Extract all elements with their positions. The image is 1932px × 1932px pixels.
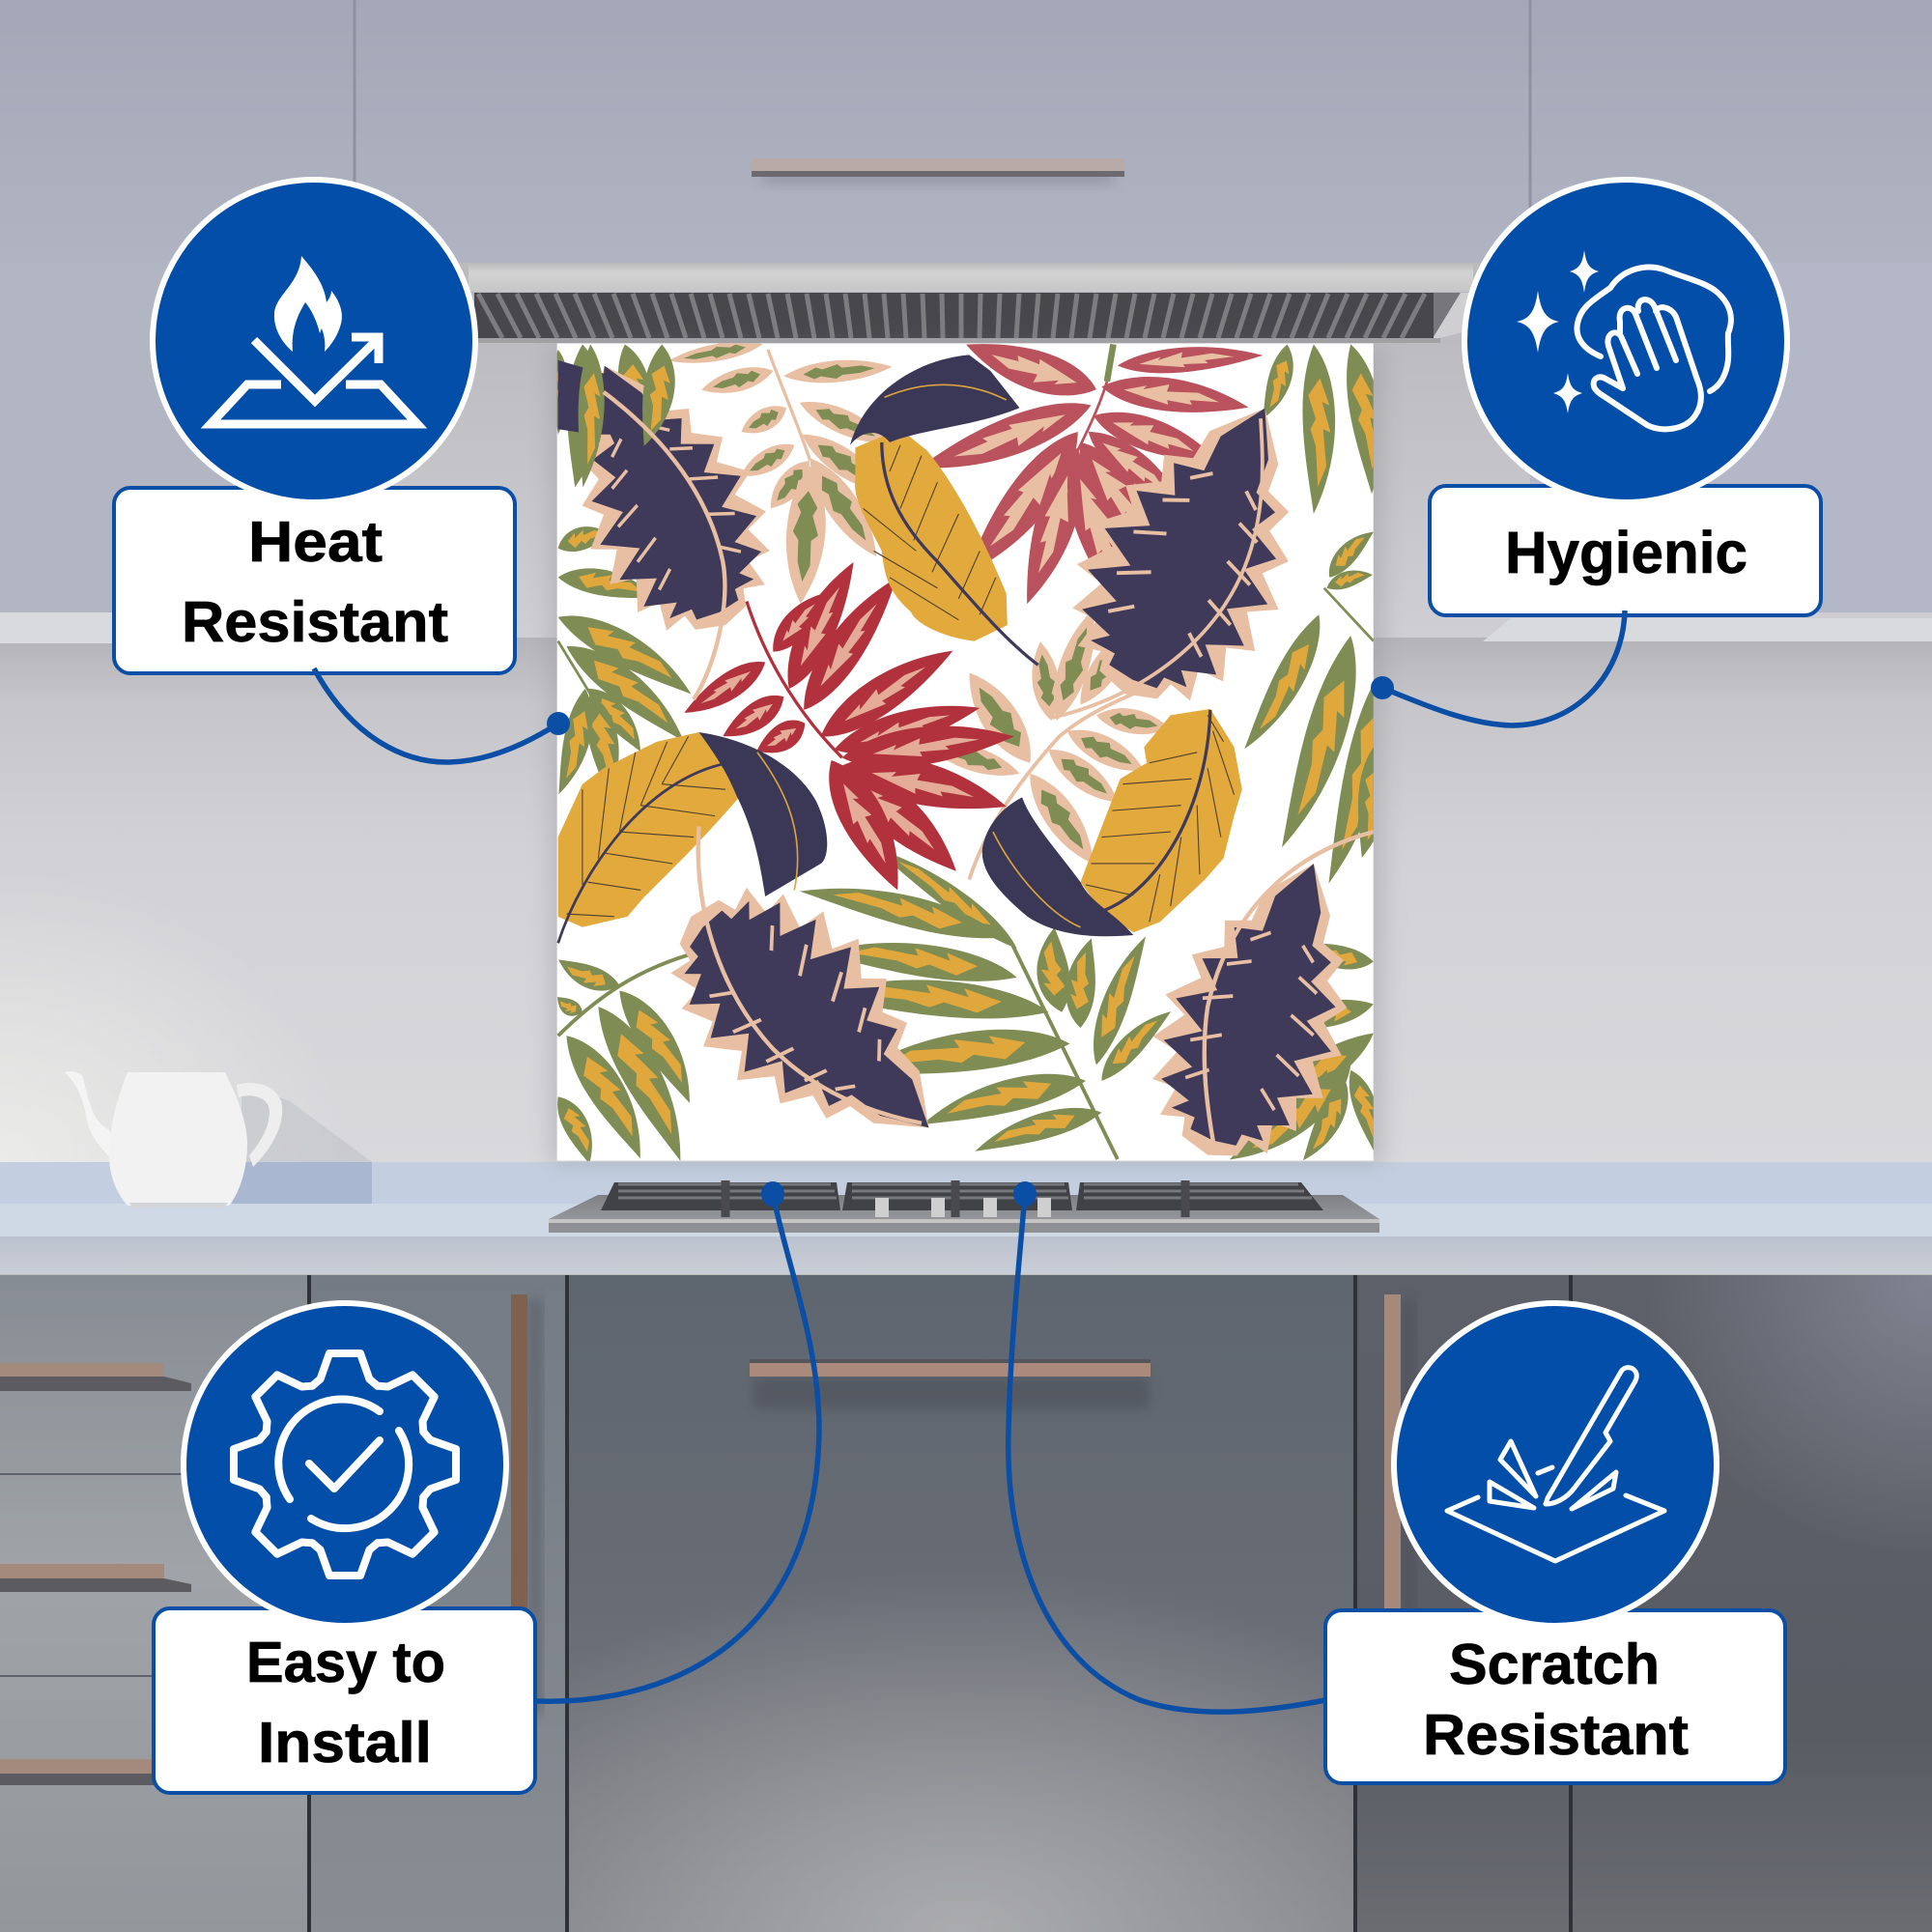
- connector dot: [547, 712, 570, 735]
- lower wall: [0, 638, 1932, 1169]
- label box: [154, 1608, 535, 1793]
- panel artwork: [556, 343, 1374, 1161]
- icon: flame over surface with reflecting arrow: [211, 256, 417, 424]
- gold banana leaves: [558, 429, 1242, 943]
- connector dot: [761, 1181, 784, 1207]
- connector line: [1009, 1194, 1325, 1712]
- worktop rear surface: [0, 1162, 1932, 1204]
- worktop top surface: [0, 1204, 1932, 1236]
- upper cabinet handle: [752, 158, 1124, 184]
- panel: tropical leaf splashback: [523, 327, 1406, 1196]
- extractor hood: [469, 264, 1478, 343]
- connector line: [537, 1194, 819, 1701]
- worktop front edge: [0, 1236, 1932, 1274]
- upper wall between cabinets and panel: [0, 290, 1932, 647]
- icon: knife scratching surface: [1447, 1368, 1664, 1561]
- dark leaves: [699, 355, 1133, 936]
- upper cabinets: [0, 0, 1932, 643]
- teapot: [65, 1071, 282, 1208]
- hob: [549, 1180, 1379, 1233]
- panel shadow: [551, 348, 1383, 1164]
- callout: hygienic: [1371, 180, 1821, 725]
- connector dot: [1013, 1181, 1037, 1207]
- icon: hand wiping with sparkles: [1517, 250, 1731, 429]
- icon: gear with check mark: [234, 1353, 456, 1576]
- label box: [1325, 1610, 1785, 1783]
- icon circle: [1464, 180, 1787, 502]
- label text line 1: Scratch: [1449, 1633, 1660, 1696]
- label text line 1: Heat: [248, 510, 383, 574]
- label text line 1: Easy to: [246, 1631, 445, 1694]
- label box: [114, 488, 515, 673]
- icon circle: [184, 1303, 506, 1626]
- label text line 2: Install: [258, 1711, 432, 1775]
- connector line: [1382, 611, 1625, 725]
- peach and green ferns: [668, 336, 1172, 879]
- palm fronds: [551, 342, 1406, 1179]
- base cabinet handles: [0, 1294, 1415, 1785]
- label text line 2: Resistant: [1423, 1703, 1689, 1767]
- icon circle: [1394, 1303, 1717, 1626]
- icon circle: [153, 180, 475, 502]
- callout: heat resistant: [114, 180, 570, 762]
- label box: [1430, 486, 1821, 615]
- callout: scratch resistant: [1009, 1181, 1785, 1783]
- connector line: [314, 668, 558, 762]
- connector dot: [1371, 676, 1394, 699]
- label text: Hygienic: [1505, 520, 1747, 585]
- base cabinets: [0, 1275, 1932, 1932]
- callout: easy to install: [154, 1181, 819, 1793]
- label text line 2: Resistant: [182, 590, 448, 654]
- rose fern: [913, 327, 1264, 618]
- wall light patch: [0, 869, 348, 1169]
- teapot shadow on wall: [242, 1084, 372, 1162]
- teapot shadow on worktop: [232, 1162, 372, 1204]
- crimson fern: [678, 554, 1016, 899]
- navy feather leaves: [523, 328, 1400, 1196]
